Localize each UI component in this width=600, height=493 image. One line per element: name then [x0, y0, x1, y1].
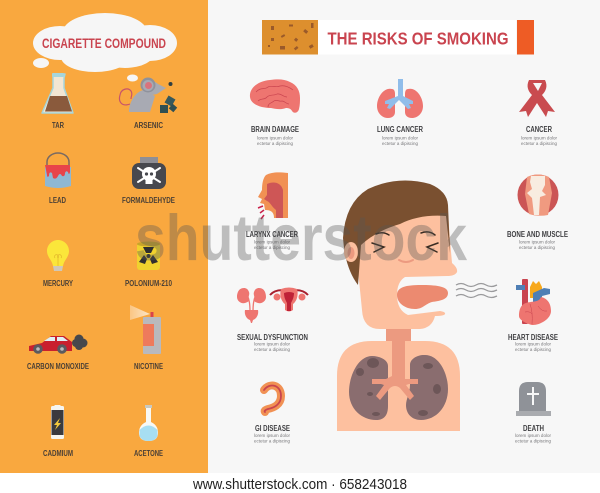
- closed eyes: [372, 232, 438, 252]
- icon: acetone flask: [139, 405, 158, 441]
- label: brain damage: lorem ipsum dolor: [257, 136, 293, 140]
- label: bone and muscle: [507, 230, 568, 250]
- label: sexual dysfunction: lorem ipsum dolor: [254, 342, 290, 346]
- label: lead: LEAD: [49, 196, 66, 205]
- label: brain damage: ectetur a dipiscing: [257, 141, 293, 146]
- label: cancer: CANCER: [526, 125, 552, 134]
- label: larynx cancer: lorem ipsum dolor: [254, 240, 290, 244]
- label: cancer: lorem ipsum dolor: [521, 136, 557, 140]
- label: bone and muscle: BONE AND MUSCLE: [507, 230, 568, 239]
- label: tar: TAR: [52, 121, 64, 130]
- label: GI disease: lorem ipsum dolor: [254, 433, 290, 438]
- icon: heart: [516, 279, 551, 325]
- label: heart disease: ectetur a dipiscing: [515, 347, 551, 352]
- label: death: ectetur a dipiscing: [515, 438, 551, 444]
- label: cadmium: CADMIUM: [43, 449, 73, 458]
- damaged lungs: [349, 355, 448, 420]
- icon: formaldehyde poison jar: [132, 157, 166, 189]
- icon: bone and muscle: [518, 174, 558, 216]
- label: GI disease: ectetur a dipiscing: [254, 438, 290, 444]
- label: death: DEATH: [523, 424, 544, 433]
- icon: cadmium battery: [51, 405, 64, 439]
- icon: tar flask: [42, 73, 73, 113]
- hair: [343, 180, 450, 285]
- bronchi: [372, 376, 418, 400]
- label: heart disease: lorem ipsum dolor: [515, 342, 551, 346]
- smile mark: [399, 260, 413, 262]
- label: lung cancer: ectetur a dipiscing: [382, 141, 418, 146]
- label: GI disease: GI DISEASE: [255, 424, 290, 433]
- footer stock id: www.shutterstock.com · 658243018: [192, 477, 407, 493]
- icon: GI tract: [264, 385, 281, 412]
- label: sexual dysfunction: SEXUAL DYSFUNCTION: [237, 333, 308, 342]
- label: larynx cancer: [246, 230, 298, 250]
- icon: kidneys and bladder: [237, 288, 266, 323]
- label: larynx cancer: LARYNX CANCER: [246, 230, 298, 239]
- label: heart disease: [508, 333, 558, 352]
- label: brain damage: [251, 125, 299, 146]
- icon: lung cancer lungs: [377, 79, 423, 118]
- label: sexual dysfunction: ectetur a dipiscing: [254, 347, 290, 352]
- icon: carbon monoxide car: [29, 334, 88, 354]
- title banner: cigarette: THE RISKS OF SMOKING: [328, 28, 508, 48]
- label: polonium-210: POLONIUM-210: [125, 279, 173, 288]
- icon: lead paint bucket: [45, 153, 71, 188]
- face: [358, 200, 457, 329]
- label: death: lorem ipsum dolor: [515, 433, 551, 438]
- icon: gravestone: [516, 382, 551, 416]
- label: cancer: [521, 125, 557, 146]
- label: carbon monoxide: CARBON MONOXIDE: [27, 362, 89, 371]
- label: formaldehyde: FORMALDEHYDE: [122, 196, 175, 205]
- illustration: smoker with damaged lungs: [337, 180, 460, 431]
- icon: arsenic mouse: [119, 78, 177, 113]
- label: death: [515, 424, 551, 444]
- label: nicotine: NICOTINE: [134, 362, 163, 371]
- icon: mercury light bulb: [47, 240, 69, 271]
- icon: nicotine spray can: [130, 305, 161, 354]
- label: acetone: ACETONE: [134, 449, 163, 458]
- panel: cigarette compound: [0, 0, 208, 473]
- right background panel: [208, 0, 600, 473]
- torso: [337, 341, 460, 431]
- ear: [344, 242, 358, 262]
- heading: thought cloud: [33, 13, 177, 82]
- label: lung cancer: lorem ipsum dolor: [382, 136, 418, 140]
- label: lung cancer: [377, 125, 423, 146]
- label: arsenic: ARSENIC: [134, 121, 163, 130]
- heading: thought cloud: CIGARETTE COMPOUND: [42, 36, 166, 51]
- icon: brain: [250, 79, 300, 113]
- label: sexual dysfunction: [237, 333, 308, 352]
- label: bone and muscle: ectetur a dipiscing: [519, 245, 555, 250]
- watermark: shutterstock: [135, 201, 468, 274]
- tongue: [397, 285, 448, 309]
- neck and trachea: [386, 329, 411, 383]
- icon: cancer ribbon: [519, 80, 555, 117]
- label: cancer: ectetur a dipiscing: [521, 141, 557, 146]
- icon: uterus: [270, 288, 308, 312]
- label: lung cancer: LUNG CANCER: [377, 125, 423, 134]
- label: brain damage: BRAIN DAMAGE: [251, 125, 299, 134]
- icon: polonium barrel: [137, 242, 160, 270]
- label: GI disease: [254, 424, 290, 444]
- icon: larynx: [258, 172, 288, 219]
- label: larynx cancer: ectetur a dipiscing: [254, 245, 290, 250]
- label: heart disease: HEART DISEASE: [508, 333, 558, 342]
- title banner: cigarette: [262, 20, 534, 54]
- label: bone and muscle: lorem ipsum dolor: [519, 240, 555, 244]
- label: mercury: MERCURY: [43, 279, 74, 288]
- smoke waves: [456, 284, 497, 298]
